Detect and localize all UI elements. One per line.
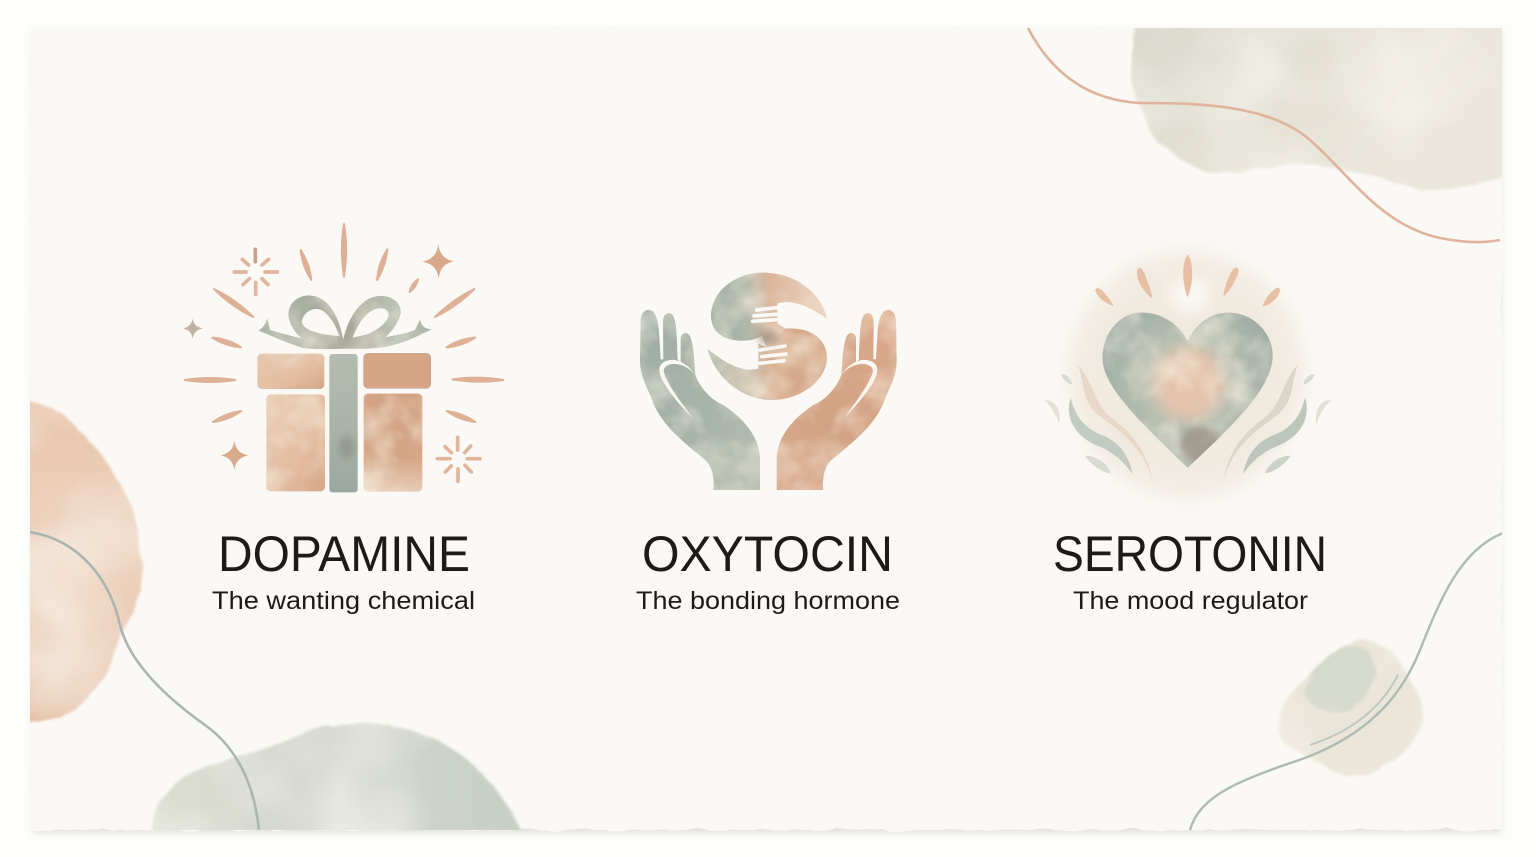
wash: bottom right sage	[1304, 648, 1374, 713]
curve: left slate	[30, 532, 259, 830]
gift lid left	[257, 354, 324, 389]
gift body left	[266, 394, 325, 491]
icon: hands holding clasped hands	[640, 273, 897, 490]
gift bow	[258, 295, 432, 349]
sparkle burst: upper left	[234, 249, 277, 294]
subtitle: oxytocin: The bonding hormone	[636, 587, 900, 615]
left flowing waves	[1044, 365, 1153, 484]
gift ribbon	[329, 354, 358, 492]
icon: gift box	[183, 224, 503, 492]
heading: dopamine: DOPAMINE	[218, 526, 470, 582]
heart glow	[1067, 250, 1307, 500]
glow highlight	[1170, 278, 1210, 312]
wash: left peach	[20, 398, 142, 726]
sparkle burst: lower right	[437, 437, 480, 481]
wash: bottom right tan	[1280, 642, 1424, 775]
star: upper right	[422, 244, 454, 279]
swirl: lower half	[707, 328, 827, 400]
column: serotonin	[1044, 250, 1331, 615]
icon: glowing heart	[1044, 250, 1331, 500]
left hand	[640, 310, 760, 490]
right flowing waves	[1223, 365, 1331, 484]
subtitle: serotonin: The mood regulator	[1073, 587, 1308, 615]
ribbon stain	[339, 435, 355, 459]
star: lower left	[221, 440, 248, 470]
gift body right	[364, 394, 422, 492]
subtitle: dopamine: The wanting chemical	[212, 587, 475, 615]
heart shadow patch	[1180, 427, 1220, 463]
curve: bottom right second stroke	[1310, 675, 1398, 745]
curve: top right copper	[1028, 28, 1500, 242]
curve: bottom right slate	[1190, 533, 1503, 830]
clasped fingers	[753, 307, 786, 363]
column: oxytocin	[636, 273, 900, 615]
heading: serotonin: SEROTONIN	[1053, 526, 1327, 582]
wash: top right tan	[1132, 20, 1510, 191]
star: left	[183, 318, 203, 339]
gift lid right	[364, 353, 431, 388]
wash: bottom sage	[151, 722, 522, 830]
heart	[1103, 313, 1273, 468]
column: dopamine	[183, 224, 503, 615]
heading: oxytocin: OXYTOCIN	[642, 526, 893, 582]
swirl: upper half	[711, 273, 827, 347]
heart rays	[1095, 254, 1280, 307]
gift rays	[185, 224, 503, 422]
right hand	[777, 310, 897, 490]
clasp shadow	[757, 330, 780, 345]
